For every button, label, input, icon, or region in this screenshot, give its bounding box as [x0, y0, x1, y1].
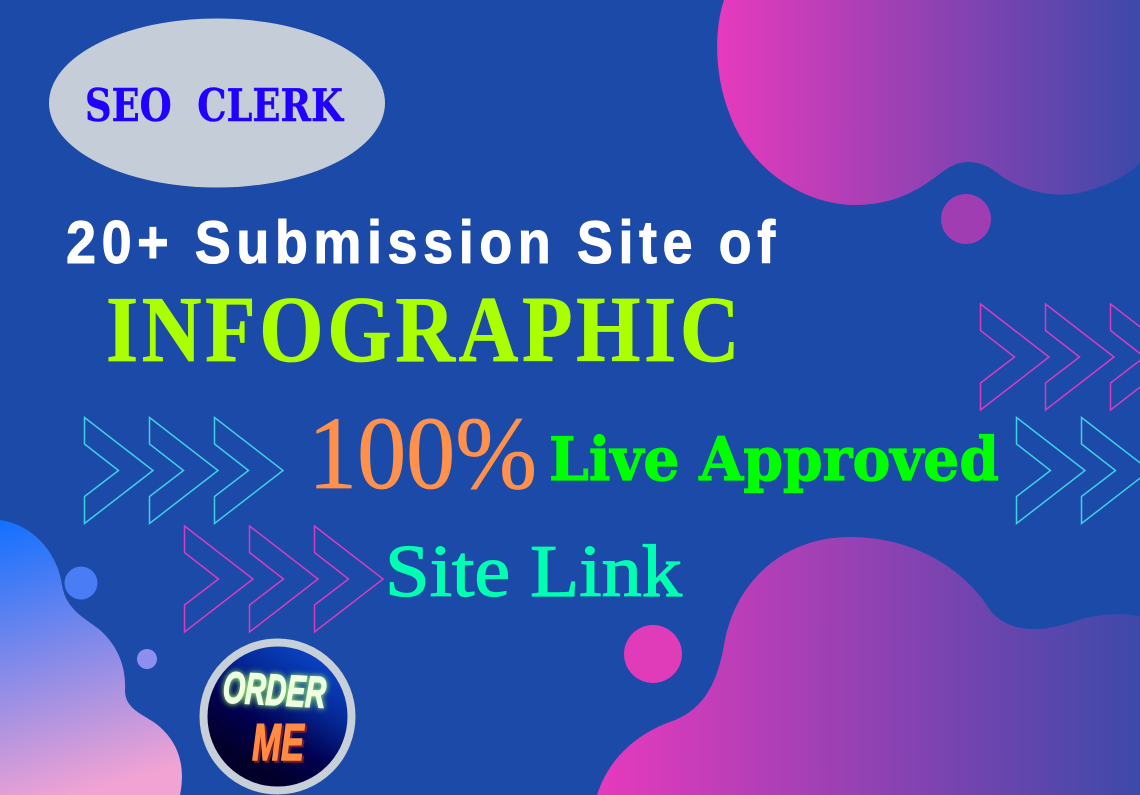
dot: purple top right [941, 194, 991, 244]
blob: top right [717, 0, 1140, 205]
dot: blue left [64, 566, 98, 600]
text: site link: Site Link [385, 531, 682, 613]
dot: pink centre [624, 625, 682, 683]
dot: violet left [137, 649, 157, 669]
badge: SEO Clerk: SEO CLERK [85, 79, 345, 132]
blob: bottom left [0, 520, 182, 795]
button: order me: ORDER [222, 663, 327, 718]
button: order me [204, 642, 352, 790]
badge: SEO Clerk [49, 18, 385, 188]
chevrons: magenta right [980, 304, 1140, 410]
button: order me: ME [252, 714, 305, 772]
heading: infographic: INFOGRAPHIC [106, 278, 740, 382]
chevrons: cyan left [84, 418, 283, 524]
text: 100%: 100% [308, 396, 537, 511]
chevrons: magenta lower [184, 526, 383, 632]
text: live approved: Live Approved [549, 425, 999, 495]
button: order me: ME [254, 716, 307, 774]
blob: bottom right [597, 537, 1140, 795]
chevrons: cyan right [1016, 418, 1140, 524]
button: order me: ORDER [222, 663, 327, 718]
heading: submission sites: 20+ Submission Site of [66, 209, 776, 277]
